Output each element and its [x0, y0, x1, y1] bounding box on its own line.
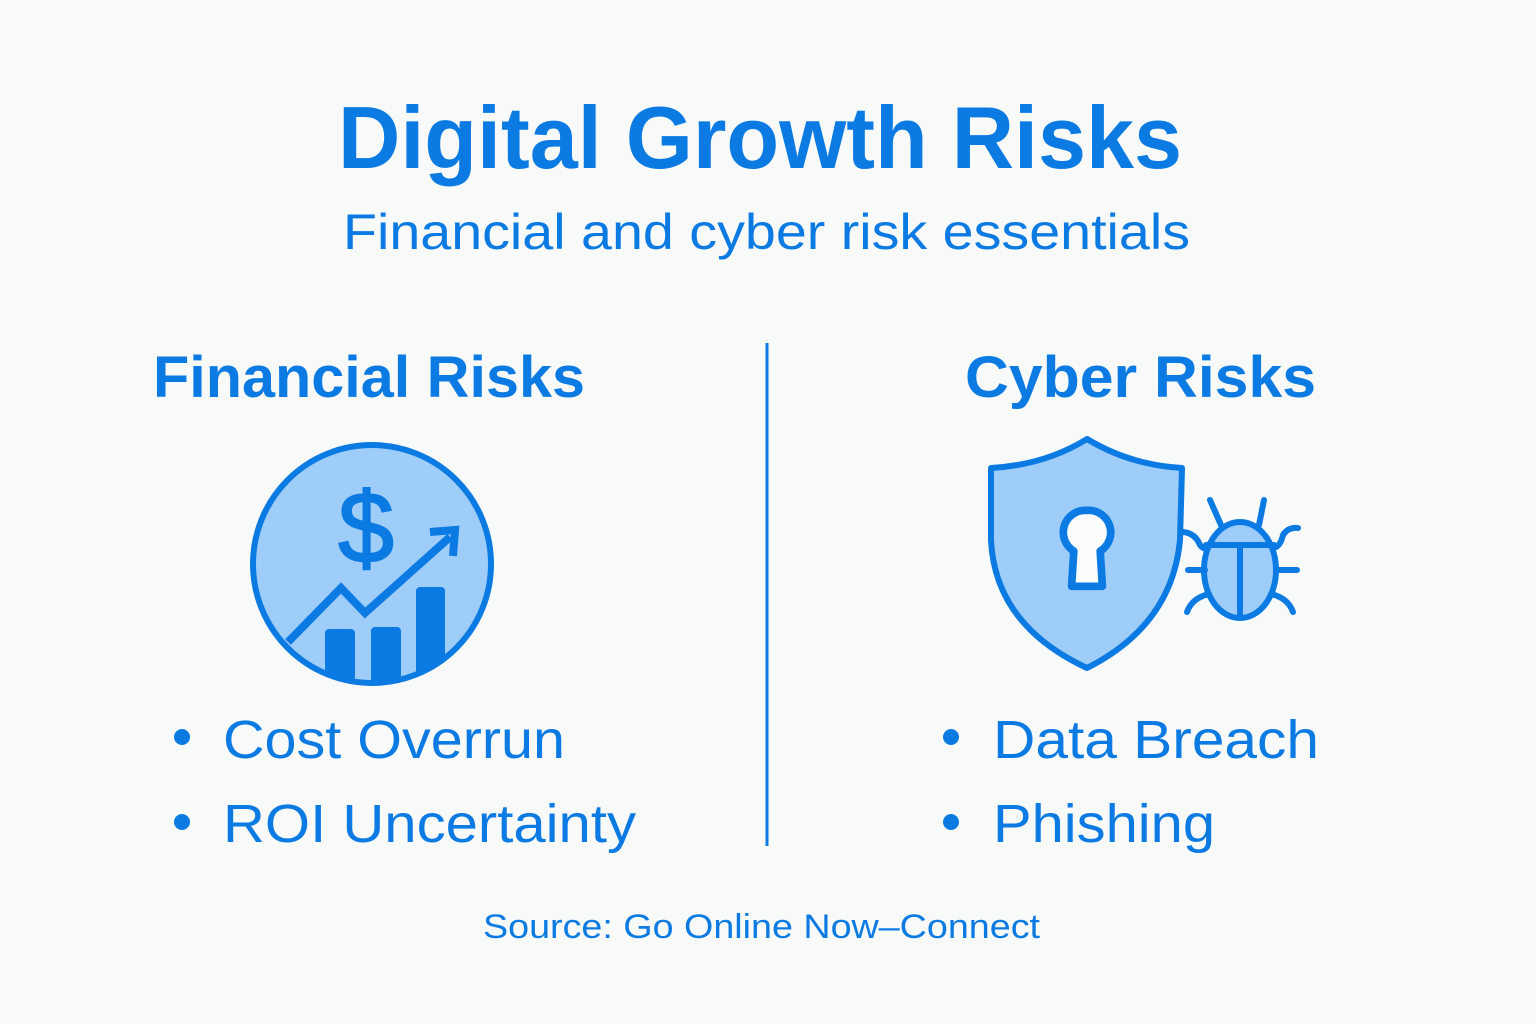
icon: dollar growth chart	[253, 445, 491, 699]
bullet list: financial	[174, 710, 636, 854]
bullet list: cyber	[943, 710, 1319, 854]
subtitle: Financial and cyber risk essentials	[343, 204, 1190, 260]
bullet list: financial: Cost Overrun	[223, 710, 565, 770]
source note: Source: Go Online Now–Connect	[483, 908, 1041, 946]
title: Digital Growth Risks	[338, 88, 1182, 187]
icon: shield with keyhole	[991, 439, 1182, 668]
divider	[766, 343, 768, 846]
heading: Cyber Risks: Cyber Risks	[965, 345, 1316, 410]
bullet list: cyber: Phishing	[993, 794, 1215, 854]
icon: bug	[1183, 500, 1298, 618]
panel: financial risks	[153, 345, 636, 854]
icon: dollar growth chart: $	[338, 472, 394, 584]
heading: Financial Risks: Financial Risks	[153, 345, 585, 410]
bullet list: cyber: Data Breach	[993, 710, 1319, 770]
bullet list: financial: ROI Uncertainty	[223, 794, 636, 854]
panel: cyber risks	[943, 345, 1319, 854]
